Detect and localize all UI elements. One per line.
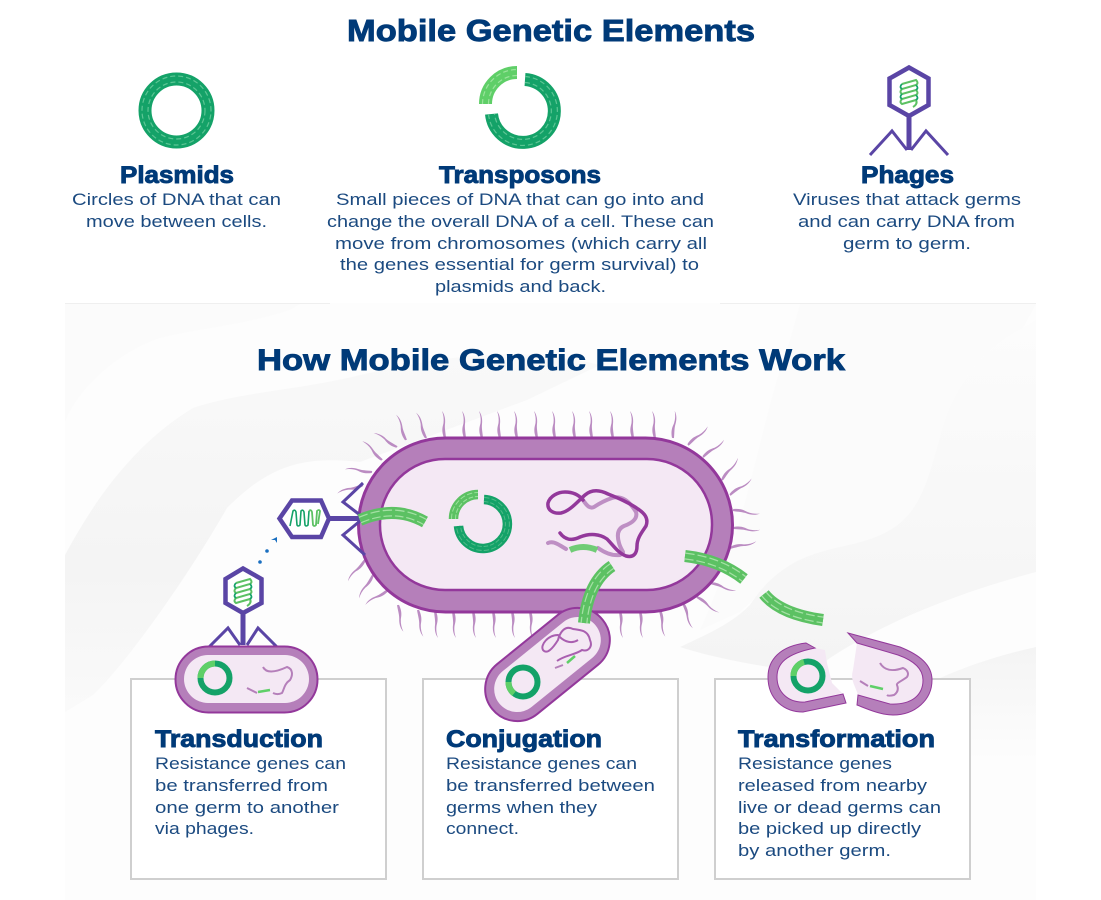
- text: transposons description: Small pieces of DNA that can go into and: [336, 190, 704, 209]
- text: phages description: and can carry DNA from: [798, 212, 1015, 231]
- germ cell wall: [358, 438, 732, 612]
- panel: phages: [793, 68, 1021, 253]
- main germ illustration: [336, 411, 760, 638]
- transformation germ, broken: [768, 633, 932, 715]
- icon: plasmid ring: [142, 76, 211, 145]
- text: plasmids description: [72, 190, 281, 231]
- text: conjugation description: be transferred between: [446, 776, 655, 795]
- text: transduction description: Resistance genes can: [155, 754, 346, 773]
- text: plasmids description: move between cells.: [86, 212, 267, 231]
- DNA strip: free: [764, 594, 823, 620]
- heading: phages: Phages: [861, 162, 954, 189]
- heading: transduction: Transduction: [155, 726, 323, 753]
- germ plasmid with transposon: [454, 494, 507, 548]
- phage landing on transduction germ: [208, 568, 278, 648]
- transduction germ: [176, 646, 318, 712]
- text: transduction description: via phages.: [155, 819, 254, 838]
- text: transformation description: [738, 754, 941, 860]
- text: transposons description: plasmids and back.: [435, 277, 606, 296]
- text: transposons description: [327, 190, 714, 296]
- text: conjugation description: Resistance genes can: [446, 754, 637, 773]
- icon: transposon ring: [482, 70, 557, 145]
- heading: plasmids: Plasmids: [120, 162, 234, 189]
- text: plasmids description: Circles of DNA that can: [72, 190, 281, 209]
- text: phages description: germ to germ.: [843, 234, 971, 253]
- title: Mobile Genetic Elements: [347, 13, 755, 48]
- text: phages description: [793, 190, 1021, 253]
- DNA strip: released from germ: [685, 556, 744, 579]
- panel: transposons: [327, 70, 714, 296]
- panel: how mobile genetic elements work background: [65, 303, 1036, 900]
- icon: phage: [870, 68, 948, 155]
- phage docked on main germ: [280, 483, 365, 555]
- panel: transformation card: [715, 679, 970, 879]
- text: transposons description: change the overall DNA of a cell. These can: [327, 212, 714, 231]
- panel: conjugation card: [423, 679, 678, 879]
- panel: transduction card: [131, 679, 386, 879]
- text: conjugation description: germs when they: [446, 798, 598, 817]
- text: conjugation description: connect.: [446, 819, 519, 838]
- DNA strip: phage injection: [360, 513, 425, 522]
- germ hairs: [336, 411, 760, 638]
- text: transposons description: move from chromosomes (which carry all: [335, 234, 707, 253]
- heading: how mobile genetic elements work: How Mobile Genetic Elements Work: [257, 344, 845, 377]
- text: transduction description: [155, 754, 346, 838]
- heading: transposons: Transposons: [439, 162, 601, 189]
- text: transformation description: be picked up directly: [738, 819, 922, 838]
- text: transformation description: by another germ.: [738, 841, 891, 860]
- text: transformation description: Resistance genes: [738, 754, 892, 773]
- text: phages description: Viruses that attack germs: [793, 190, 1021, 209]
- conjugation germ: [472, 595, 623, 734]
- text: transposons description: the genes essential for germ survival) to: [340, 255, 699, 274]
- arrow: dotted path of phage: [258, 537, 277, 564]
- text: transformation description: released from nearby: [738, 776, 928, 795]
- panel: plasmids: [72, 76, 281, 231]
- text: transformation description: live or dead germs can: [738, 798, 941, 817]
- text: conjugation description: [446, 754, 655, 838]
- heading: transformation: Transformation: [738, 726, 935, 753]
- heading: conjugation: Conjugation: [446, 726, 602, 753]
- germ cytoplasm: [380, 459, 712, 590]
- DNA strip: conjugation bridge: [584, 566, 612, 623]
- text: transduction description: one germ to another: [155, 798, 339, 817]
- germ chromosome: [548, 491, 647, 556]
- text: transduction description: be transferred from: [155, 776, 328, 795]
